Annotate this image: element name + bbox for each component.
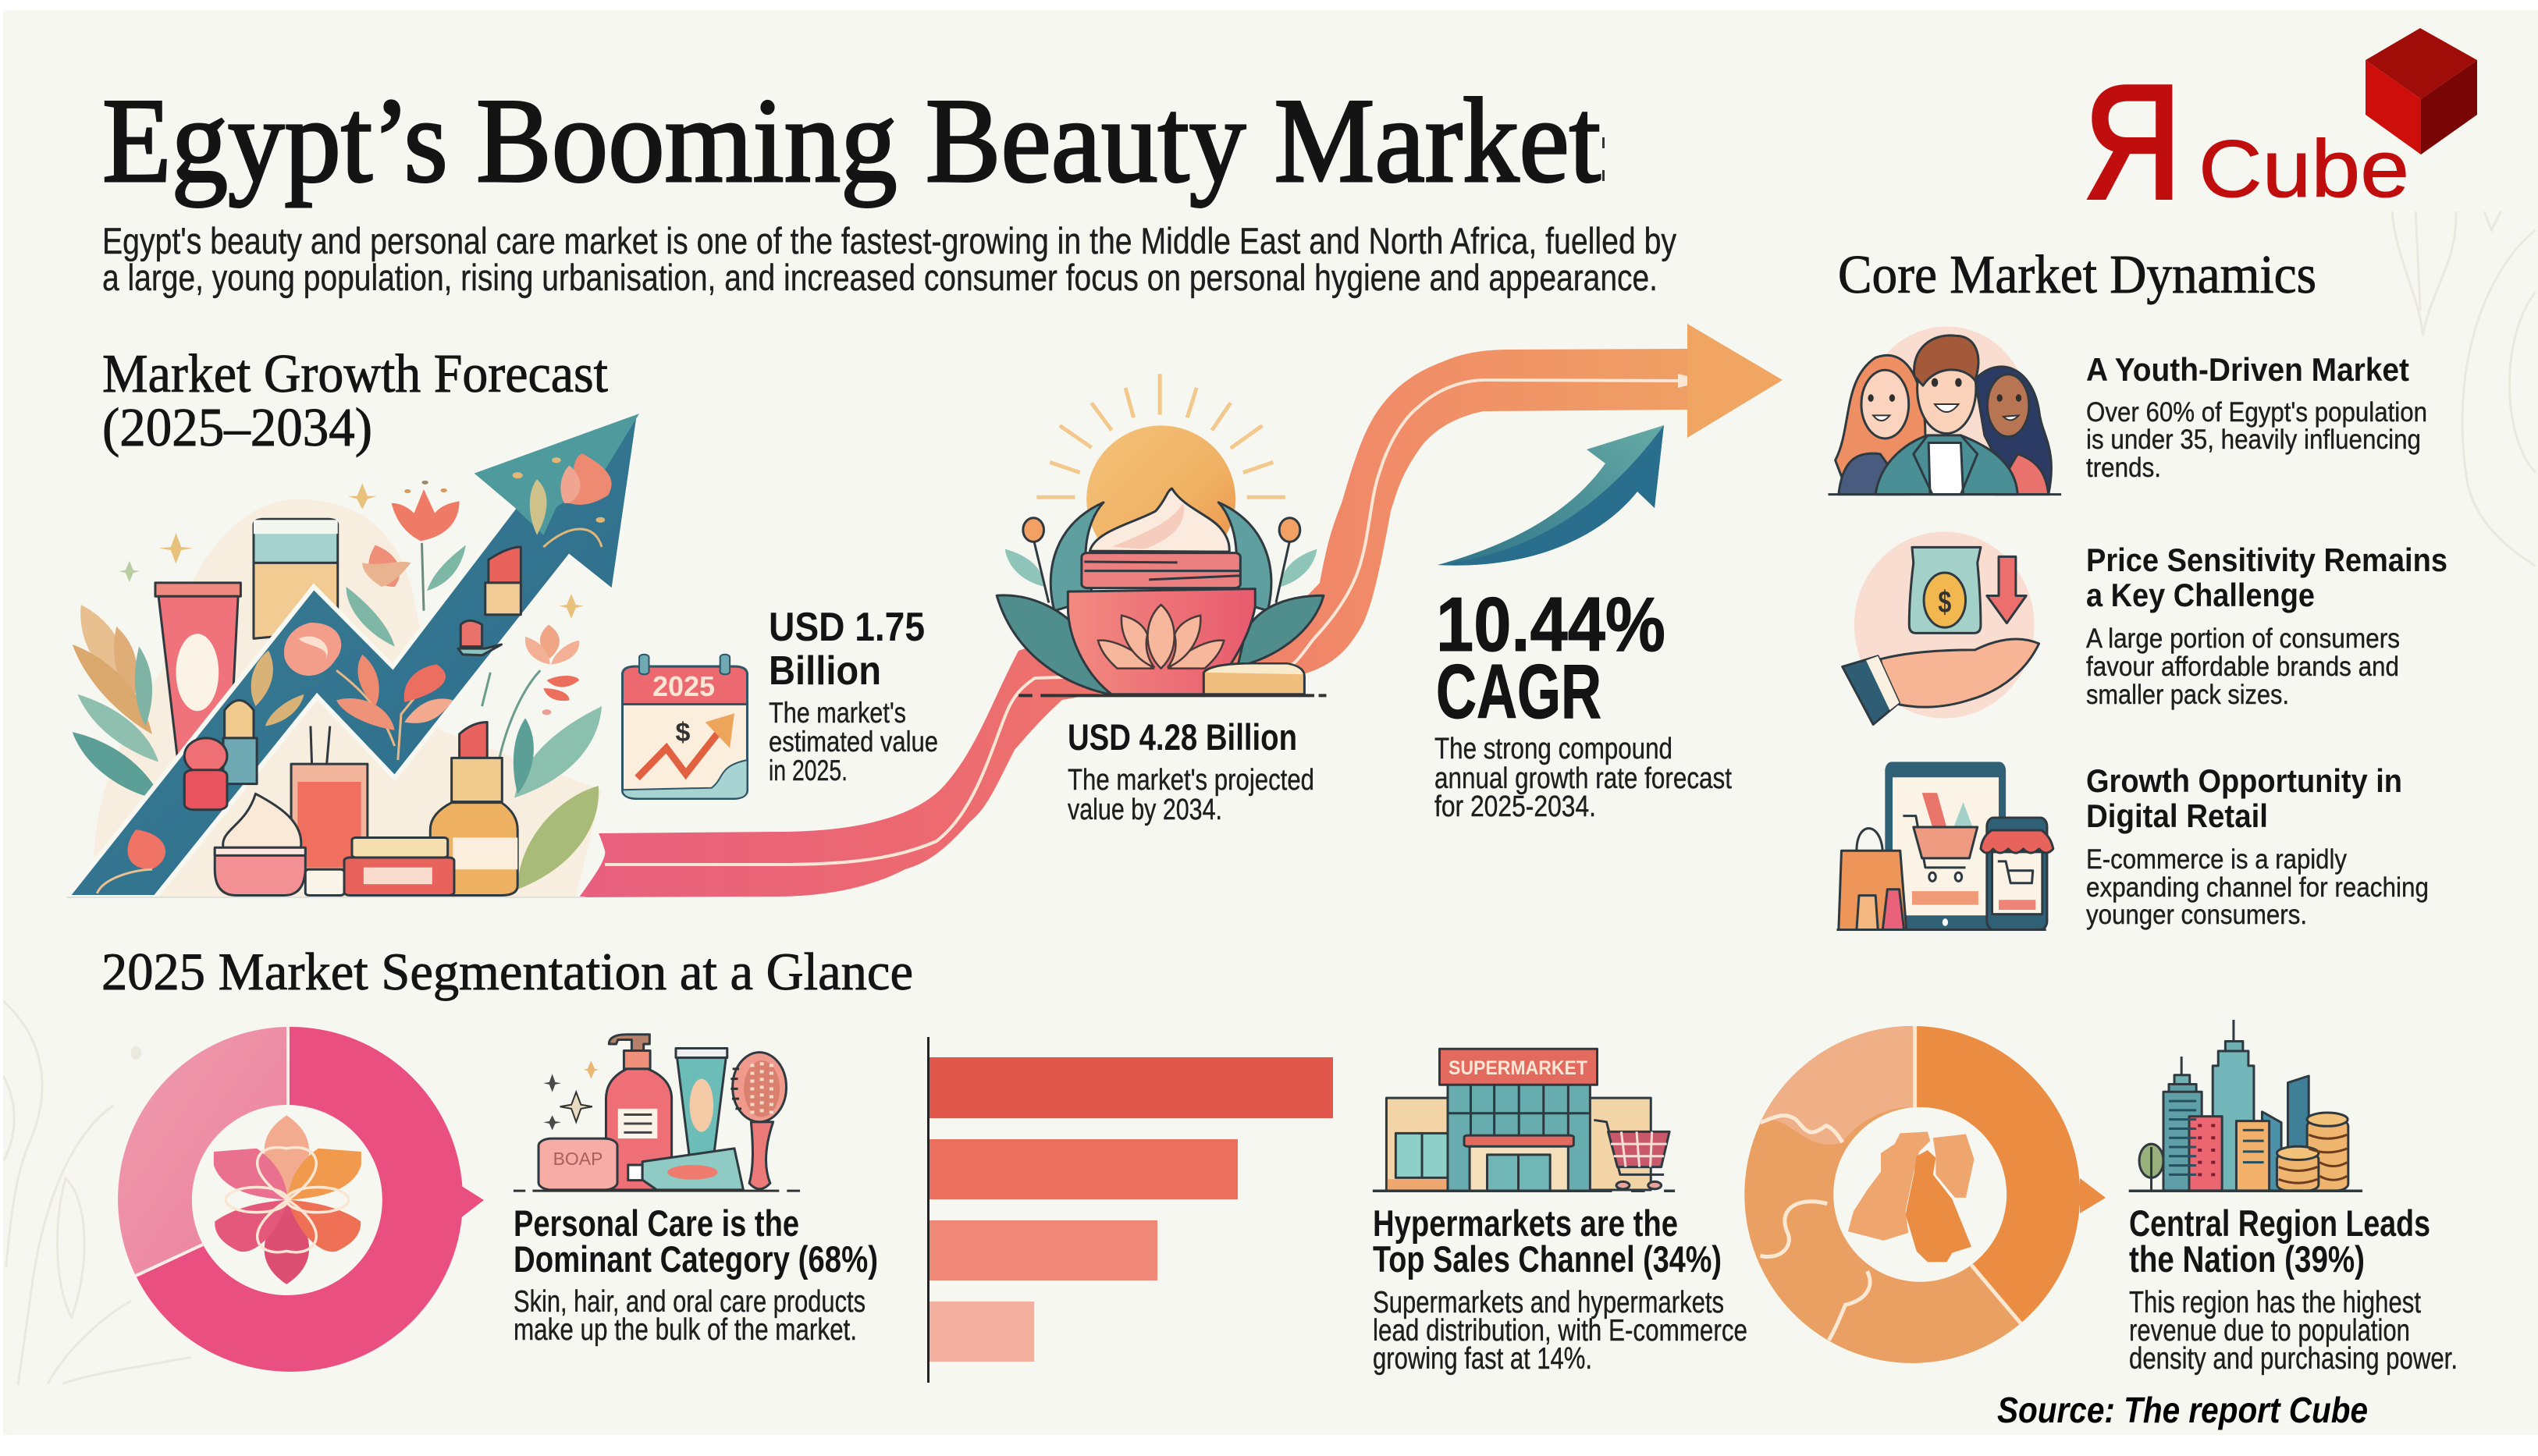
text: personal care: Skin, hair, and oral care products [514,1285,866,1319]
icon: supermarket [1373,1049,1675,1191]
stat: 10.44% CAGR [1434,581,1732,823]
text: hypermarkets: Top Sales Channel (34%) [1373,1238,1722,1280]
icon: city and coins [2129,1020,2362,1191]
donut chart: personal care [118,1027,484,1372]
background leaves [73,605,602,890]
icon: calendar 2025: $ [676,718,691,748]
chapstick [184,700,257,810]
flowers behind arrow [347,481,466,647]
text: hypermarkets: Hypermarkets are the [1373,1202,1678,1244]
text: digital retail: E-commerce is a rapidly [2086,844,2347,875]
flower [214,1115,361,1284]
egypt map [1848,1131,1975,1262]
text: youth-driven market [2086,351,2427,483]
back leaves and buds [997,502,1324,694]
glass [291,726,368,895]
text: price sensitivity: a Key Challenge [2086,577,2315,613]
bar 4 [930,1302,1034,1362]
donut pointer [457,1183,484,1221]
icon: supermarket: SUPERMARKET [1449,1057,1587,1079]
text: hypermarkets: lead distribution, with E-commerce [1373,1314,1747,1348]
down arrow [1987,556,2026,623]
text: hypermarkets [1373,1202,1747,1376]
stat: 10.44% CAGR: CAGR [1436,648,1601,734]
pump bottle [606,1035,672,1190]
icon: digital retail [1836,762,2053,930]
cart [1903,793,1978,881]
stat: USD 1.75 Billion [769,605,938,787]
stat: USD 4.28 Billion [1068,716,1314,826]
text: central region: the Nation (39%) [2129,1238,2365,1280]
stat: USD 1.75 Billion: USD 1.75 [769,605,925,650]
text: personal care: make up the bulk of the market. [514,1313,857,1347]
icon: calendar 2025: 2025 [652,670,715,702]
heading: market segmentation: 2025 Market Segmentation at a Glance [101,942,913,1001]
donut chart: regions [1744,1026,2106,1363]
lying tube [628,1149,743,1190]
stat: USD 1.75 Billion: Billion [769,648,881,694]
stat: USD 1.75 Billion: estimated value [769,726,938,758]
zigzag arrow [66,414,639,897]
price bag [1909,547,1981,633]
dark segment [136,1027,463,1372]
logo cube [2366,28,2477,154]
brush [730,1053,787,1189]
hand [1880,639,2039,707]
teal tube [676,1049,727,1159]
top-left segment [1760,1026,1915,1145]
text: central region: revenue due to population [2129,1314,2410,1348]
jar lotus [1098,605,1224,669]
text: central region [2129,1202,2458,1376]
icon: hand with price bag: $ [1938,584,1952,620]
lipstick on arrow [458,547,521,655]
man center [1875,336,2017,495]
bar chart: sales channels [927,1037,1333,1383]
cream [1089,488,1229,552]
icon: young people [1828,326,2061,495]
text: personal care [514,1202,878,1347]
text: youth-driven market: Over 60% of Egypt's population [2086,397,2427,428]
stat: USD 4.28 Billion: USD 4.28 Billion [1068,716,1297,758]
soap [539,1138,617,1190]
shopping bag [1839,829,1907,930]
stat: 10.44% CAGR: annual growth rate forecast [1434,762,1732,795]
cream jar [215,794,305,895]
stat: USD 1.75 Billion: in 2025. [769,755,848,787]
text: price sensitivity [2086,542,2447,710]
text: price sensitivity: A large portion of consumers [2086,623,2400,654]
leading segment [1915,1026,2080,1323]
heading: market growth forecast: Market Growth Forecast [102,344,609,404]
stat: 10.44% CAGR: for 2025-2034. [1434,790,1596,823]
logo mark: Я [2084,52,2181,232]
source note: Source: The report Cube [1997,1390,2368,1430]
cart [1594,1120,1669,1189]
text: price sensitivity: smaller pack sizes. [2086,680,2289,710]
growth ribbon arrow [579,324,1783,897]
stars [543,1060,599,1130]
bar 3 [930,1220,1157,1280]
bar 2 [930,1139,1238,1199]
text: youth-driven market: is under 35, heavily influencing [2086,424,2421,455]
text: youth-driven market: A Youth-Driven Market [2086,351,2409,388]
intro text: Egypt's beauty and personal care market is one of the fastest-growing in the Middle East and North Africa, fuelled by [102,220,1676,261]
illustration: cosmetics and rising arrow [66,414,639,897]
tube [155,583,240,762]
base ring [1744,1026,2021,1363]
stat: 10.44% CAGR: 10.44% [1436,581,1665,667]
text: personal care: Personal Care is the [514,1202,799,1244]
icon: teal growth arrow [1438,425,1664,566]
text: hypermarkets: growing fast at 14%. [1373,1342,1592,1376]
title: Egypt’s Booming Beauty Market [102,73,1601,208]
logo word: Cube [2199,124,2409,215]
text: youth-driven market: trends. [2086,453,2161,483]
small lid [1203,664,1304,694]
intro text: a large, young population, rising urbanisation, and increased consumer focus on personal hygiene and appearance. [102,257,1658,298]
ring pointer [2080,1178,2106,1213]
ring dividers [1760,1026,2021,1341]
coin stacks [2277,1113,2348,1191]
heading: core market dynamics: Core Market Dynamics [1838,245,2316,305]
jar body [1068,589,1255,694]
towers [2163,1020,2309,1191]
faces [1868,378,2021,402]
phone shop [1981,818,2053,930]
bottle [254,519,338,638]
heading: market growth forecast: (2025–2034) [102,398,372,458]
icon: hand with price bag [1843,531,2039,725]
text: central region: Central Region Leads [2129,1202,2430,1244]
woman right [1975,367,2051,495]
light segment [118,1027,288,1276]
decorative leaf outlines [3,1001,191,1385]
tree [2139,1144,2163,1190]
tablet [1885,762,2006,930]
illustration: cream jar with sun [997,374,1326,695]
text: digital retail: younger consumers. [2086,900,2307,930]
text: price sensitivity: favour affordable brands and [2086,652,2399,682]
jar lid [1082,553,1240,588]
text: digital retail: Digital Retail [2086,797,2268,834]
text: hypermarkets: Supermarkets and hypermarkets [1373,1286,1724,1319]
logo: R Cube [2084,28,2477,232]
text: price sensitivity: Price Sensitivity Remains [2086,542,2447,578]
text: digital retail: Growth Opportunity in [2086,762,2402,799]
text: personal care: Dominant Category (68%) [514,1238,878,1280]
soap: BOAP [553,1149,603,1169]
gold bottle [430,723,517,895]
arrow florals [97,453,612,893]
intro text [102,220,1676,298]
text: digital retail: expanding channel for reaching [2086,872,2429,903]
stat: USD 4.28 Billion: value by 2034. [1068,794,1222,826]
heading: market growth forecast [102,344,609,458]
red jar [344,837,454,895]
stat: USD 4.28 Billion: The market's projected [1068,764,1314,797]
text: central region: density and purchasing power. [2129,1342,2458,1376]
woman left [1836,355,1925,495]
sun rays [1036,374,1285,497]
icon: calendar 2025 [622,655,747,798]
icon: personal care products [514,1035,800,1191]
stat: USD 1.75 Billion: The market's [769,697,906,729]
stat: 10.44% CAGR: The strong compound [1434,733,1672,765]
sparkle stars [119,483,584,619]
text: digital retail [2086,762,2429,930]
bar 1 [930,1057,1333,1118]
sun [1086,425,1235,573]
text: central region: This region has the highest [2129,1286,2421,1319]
